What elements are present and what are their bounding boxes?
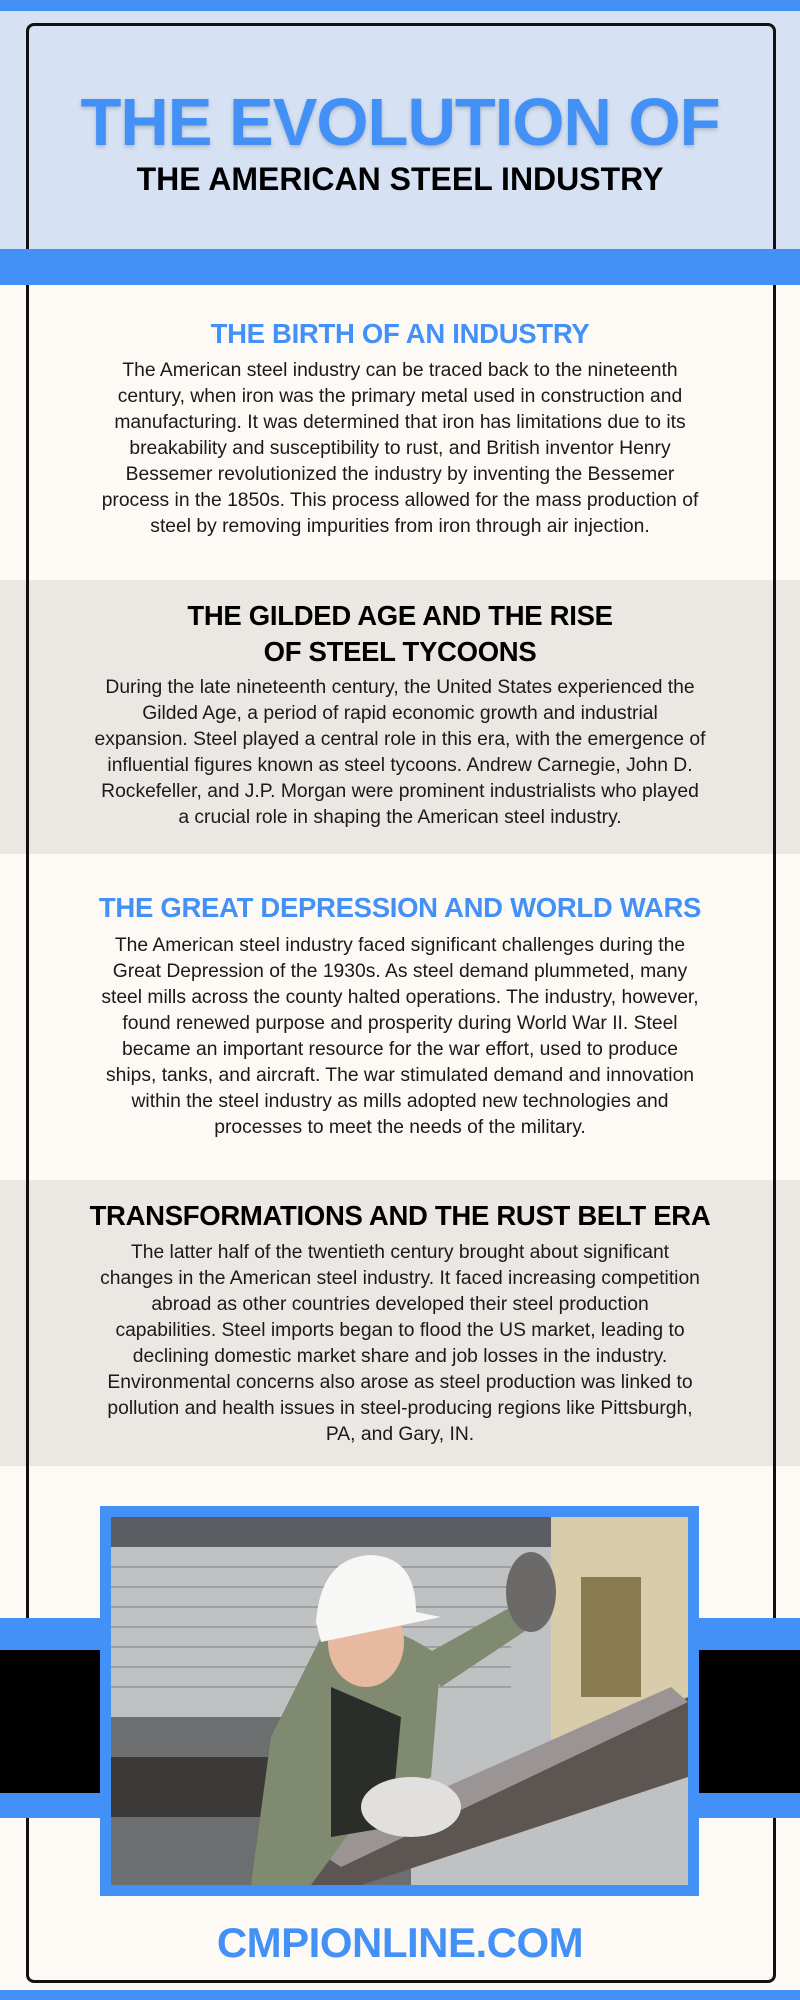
photo: steel worker	[100, 1506, 699, 1896]
section 3 body: became an important resource for the war effort, used to produce	[122, 1039, 678, 1060]
section 2 body: Gilded Age, a period of rapid economic growth and industrial	[142, 703, 658, 724]
section 2 body: expansion. Steel played a central role in this era, with the emergence of	[95, 729, 705, 750]
section 2 background	[0, 580, 800, 854]
section 2 heading: OF STEEL TYCOONS	[264, 636, 536, 667]
section 3 body: ships, tanks, and aircraft. The war stimulated demand and innovation	[106, 1065, 694, 1086]
section 1 heading: THE BIRTH OF AN INDUSTRY	[211, 318, 589, 349]
section 4 heading: TRANSFORMATIONS AND THE RUST BELT ERA	[90, 1200, 710, 1231]
blue band	[0, 249, 800, 285]
section 4 body: PA, and Gary, IN.	[326, 1424, 474, 1445]
section 1 body: process in the 1850s. This process allowed for the mass production of	[102, 490, 698, 511]
section 3 body: within the steel industry as mills adopted new technologies and	[132, 1091, 668, 1112]
section 4 background	[0, 1180, 800, 1466]
section 1 body	[102, 360, 698, 537]
section 1 body: The American steel industry can be traced back to the nineteenth	[122, 360, 678, 381]
section 1 body: Bessemer revolutionized the industry by inventing the Bessemer	[126, 464, 674, 485]
footer url: CMPIONLINE.COM	[217, 1919, 583, 1966]
section 4 body	[100, 1242, 700, 1445]
section 2 body: During the late nineteenth century, the United States experienced the	[105, 677, 695, 698]
section 1 body: manufacturing. It was determined that iron has limitations due to its	[114, 412, 686, 433]
section 2 body: a crucial role in shaping the American steel industry.	[178, 807, 622, 828]
section 3 body: Great Depression of the 1930s. As steel demand plummeted, many	[113, 961, 687, 982]
section 1 body: century, when iron was the primary metal used in construction and	[118, 386, 682, 407]
bottom bar	[0, 1990, 800, 2000]
top bar	[0, 0, 800, 11]
section 3 body	[101, 935, 699, 1138]
section 4 body: changes in the American steel industry. It faced increasing competition	[100, 1268, 700, 1289]
section 2 heading: THE GILDED AGE AND THE RISE	[187, 600, 613, 631]
section 3 body: The American steel industry faced significant challenges during the	[115, 935, 685, 956]
section 4 body: pollution and health issues in steel-producing regions like Pittsburgh,	[107, 1398, 693, 1419]
section 4 body: abroad as other countries developed their steel production	[151, 1294, 649, 1315]
side bands	[0, 1618, 800, 1818]
section 2 body	[95, 677, 706, 828]
section 4 body: declining domestic market share and job losses in the industry.	[133, 1346, 667, 1367]
section 3 heading: THE GREAT DEPRESSION AND WORLD WARS	[99, 892, 701, 923]
section 4 body: The latter half of the twentieth century brought about significant	[131, 1242, 669, 1263]
section 4 body: Environmental concerns also arose as steel production was linked to	[107, 1372, 693, 1393]
section 3 body: found renewed purpose and prosperity during World War II. Steel	[122, 1013, 678, 1034]
section 2 heading	[187, 600, 613, 667]
title: THE EVOLUTION OF	[80, 85, 720, 160]
header background	[0, 11, 800, 249]
section 3 body: steel mills across the county halted operations. The industry, however,	[101, 987, 699, 1008]
section 3 body: processes to meet the needs of the military.	[214, 1117, 586, 1138]
subtitle: THE AMERICAN STEEL INDUSTRY	[137, 161, 663, 197]
section 1 body: breakability and susceptibility to rust, and British inventor Henry	[129, 438, 671, 459]
section 2 body: Rockefeller, and J.P. Morgan were prominent industrialists who played	[101, 781, 699, 802]
section 2 body: influential figures known as steel tycoons. Andrew Carnegie, John D.	[107, 755, 693, 776]
section 1 body: steel by removing impurities from iron through air injection.	[150, 516, 650, 537]
section 4 body: capabilities. Steel imports began to flood the US market, leading to	[115, 1320, 685, 1341]
